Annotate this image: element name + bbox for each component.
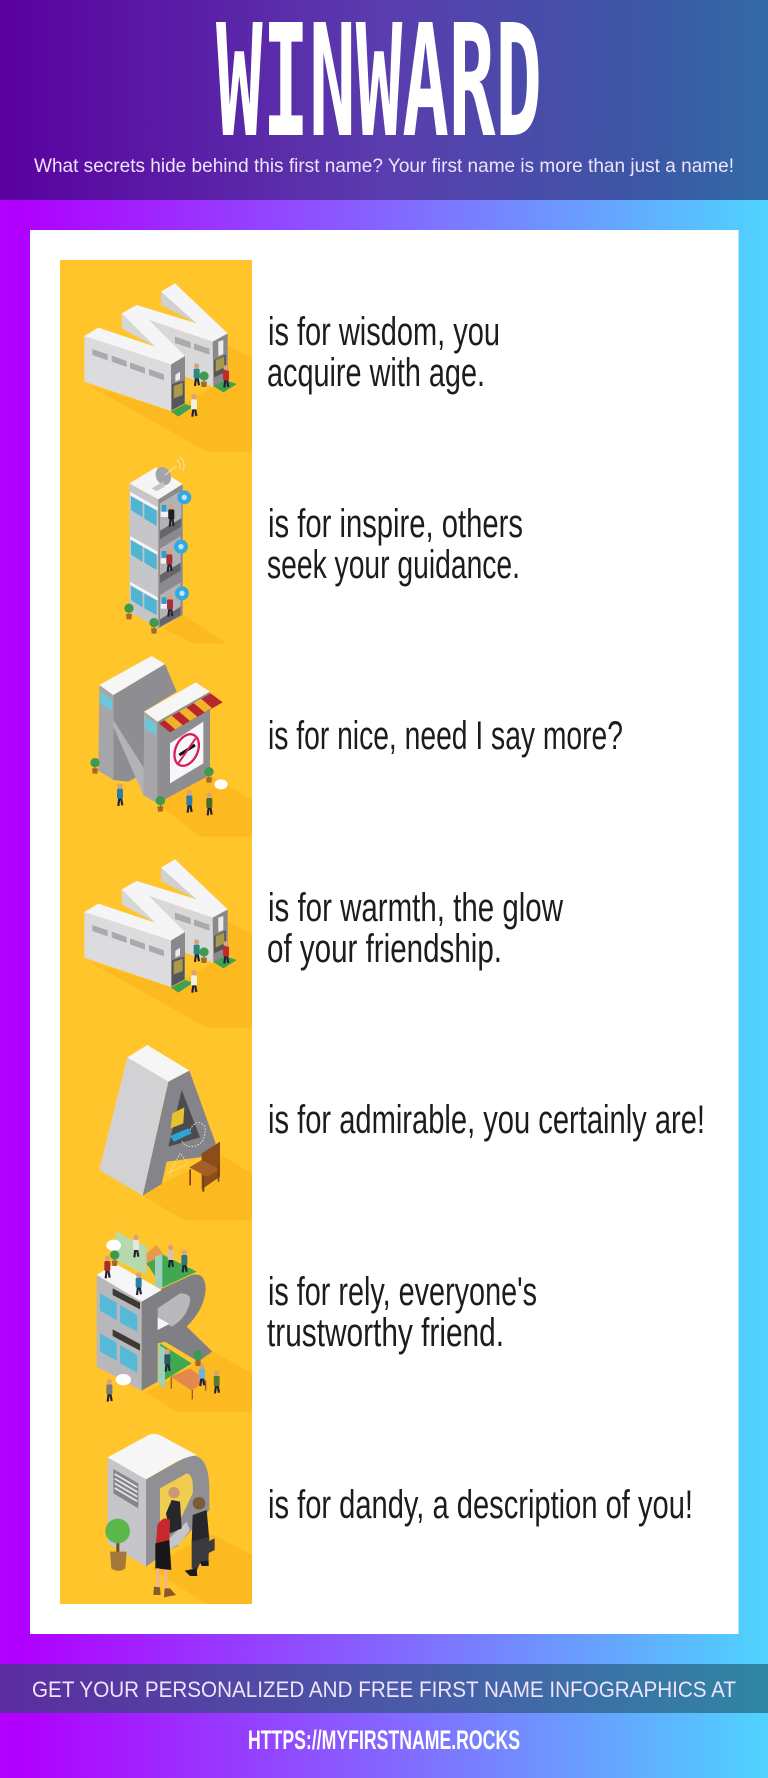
man with briefcase [185,1497,215,1576]
row 1 text: is for wisdom, you [268,310,500,354]
icon: chair [189,1142,220,1192]
row 6 text: is for rely, everyone's [268,1270,537,1314]
man in doorway [166,1487,182,1533]
row 4 text: of your friendship. [267,927,502,971]
row 2 text: is for inspire, others [268,502,523,546]
woman [153,1518,176,1597]
row 6 text: trustworthy friend. [267,1311,504,1355]
panel: yellow illustration column [60,260,252,1604]
row 4 text [267,886,563,971]
panel: white card [30,230,738,1634]
icon: no smoking sign [170,722,204,783]
icon: letter R building [97,1232,252,1412]
footer band [0,1664,768,1713]
row 1 text: acquire with age. [267,351,485,395]
icon: orange desk [171,1368,207,1399]
icon: potted tree [105,1519,130,1571]
icon: vent [113,1469,138,1508]
icon: letter W building repeat [84,859,252,1028]
icon: letter I tower [124,457,227,643]
row 2 text [267,502,523,587]
icon: letter N shop [90,656,252,837]
footer url: HTTPS://MYFIRSTNAME.ROCKS [248,1725,520,1755]
row 6 text [267,1270,537,1355]
icon: striped awning [159,693,223,732]
row 2 text: seek your guidance. [267,543,520,587]
header band [0,0,768,200]
footer call to action: GET YOUR PERSONALIZED AND FREE FIRST NAME INFOGRAPHICS AT [32,1677,736,1702]
subtitle: What secrets hide behind this first name? Your first name is more than just a name! [34,155,734,177]
icon: letter A [99,1045,252,1220]
icon: letter W building [84,283,252,452]
icon: letter D entrance [105,1434,252,1604]
icon: satellite dish [152,457,184,491]
row 1 text [267,310,500,395]
row 3 text: is for nice, need I say more? [268,714,623,758]
row 4 text: is for warmth, the glow [268,886,563,930]
